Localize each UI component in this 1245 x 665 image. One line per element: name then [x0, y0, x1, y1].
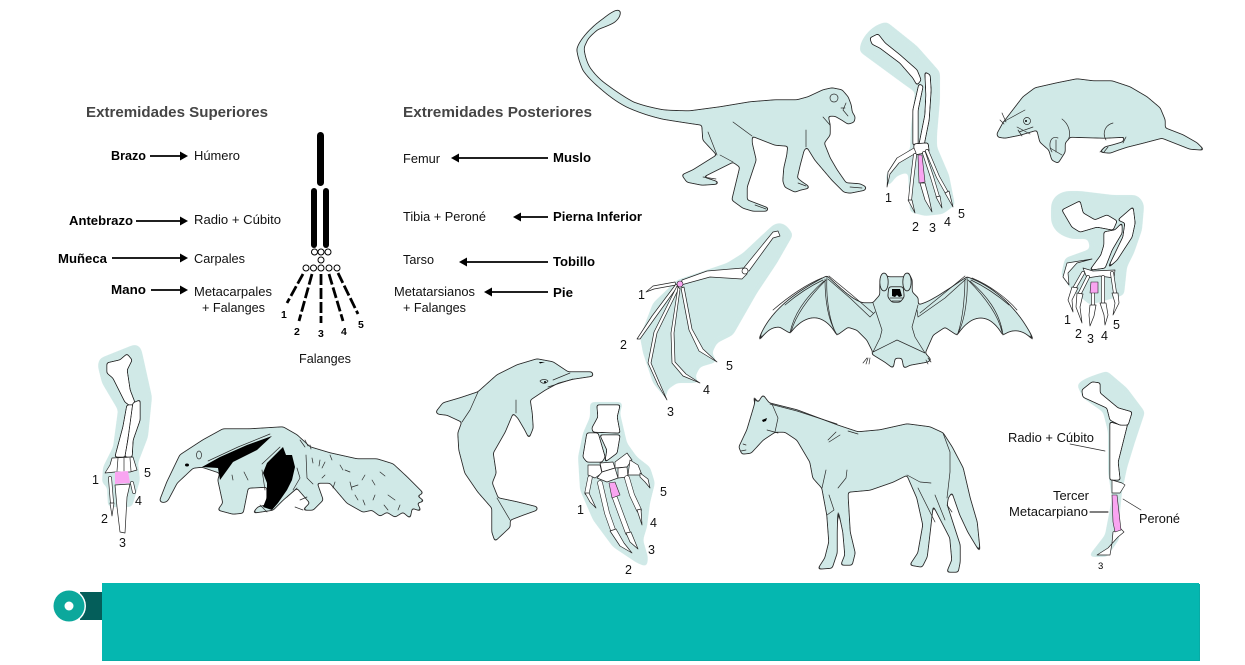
- illustration: bat: [758, 272, 1035, 368]
- panel: mole forelimb skeleton: [1051, 191, 1144, 346]
- digit numbers: 1: [281, 309, 287, 321]
- digit labels: 3: [667, 405, 674, 419]
- carpal circles: [303, 249, 340, 271]
- row: thigh to femur: [403, 151, 591, 166]
- row: wrist to carpals: Muñeca: [58, 252, 108, 266]
- label: third metacarpal: Metacarpiano: [1009, 505, 1088, 519]
- arm bones: [1082, 382, 1132, 555]
- digit numbers: 5: [358, 319, 364, 331]
- digit numbers: 3: [318, 328, 324, 340]
- row: wrist to carpals: Carpales: [194, 252, 245, 266]
- limb background: [860, 22, 955, 216]
- highlighted metacarpal: [1090, 282, 1098, 293]
- row: arm to humerus: [111, 149, 240, 163]
- digit labels: [885, 191, 965, 235]
- row: hand to metacarpals and phalanges: + Falanges: [202, 301, 265, 315]
- label: fibula: [1123, 499, 1180, 526]
- digit labels: 2: [101, 512, 108, 526]
- arm and wrist bones: [583, 405, 642, 482]
- row: thigh to femur: Femur: [403, 152, 440, 166]
- digit labels: 2: [912, 220, 919, 234]
- highlighted metacarpal: [609, 482, 620, 498]
- digit labels: 3: [119, 536, 126, 550]
- black shoulder stripe: [202, 436, 272, 480]
- digit labels: 5: [660, 485, 667, 499]
- arm bones: [681, 231, 780, 285]
- limb background: [98, 345, 152, 507]
- digit labels: [92, 466, 151, 550]
- arm bones: [1062, 201, 1135, 285]
- digit numbers: 4: [341, 326, 347, 338]
- panel: horse forelimb skeleton: [1008, 371, 1180, 572]
- digit labels: [1064, 313, 1120, 346]
- illustration: anteater: [160, 427, 424, 518]
- digit labels: 1: [638, 288, 645, 302]
- humerus bar: [317, 132, 324, 186]
- row: foot to metatarsals and phalanges: [394, 285, 573, 315]
- dark tab: [80, 592, 102, 620]
- dashed phalanges: [287, 273, 358, 323]
- digit labels: 1: [1064, 313, 1071, 327]
- limb background: [1051, 191, 1144, 305]
- row: lower leg to tibia and fibula: Pierna Inferior: [553, 210, 642, 224]
- label: phalanges: Falanges: [299, 352, 351, 366]
- finger bones: [585, 473, 650, 553]
- finger bones: [110, 478, 134, 533]
- row: hand to metacarpals and phalanges: Mano: [111, 283, 146, 297]
- digit labels: 3: [648, 543, 655, 557]
- row: ankle to tarsus: [403, 253, 595, 269]
- digit labels: 3: [1087, 332, 1094, 346]
- panel: anteater forelimb skeleton: [92, 345, 152, 550]
- black foreleg patch: [263, 447, 295, 510]
- highlighted metacarpal: [115, 471, 130, 484]
- row: foot to metatarsals and phalanges: Metatarsianos: [394, 285, 475, 299]
- footer bar with bullet: [52, 583, 1200, 661]
- digit labels: 2: [1075, 327, 1082, 341]
- digit numbers: 2: [294, 326, 300, 338]
- row: wrist to carpals: [58, 252, 245, 266]
- row: forearm to radius and ulna: Antebrazo: [69, 214, 133, 228]
- digit labels: 1: [885, 191, 892, 205]
- digit numbers: [281, 309, 364, 340]
- row: lower leg to tibia and fibula: Tibia + Peroné: [403, 210, 486, 224]
- digit labels: 4: [135, 494, 142, 508]
- label: third metacarpal: [1009, 489, 1108, 519]
- radius and ulna bars: [311, 188, 329, 248]
- bar shadow: [102, 584, 1200, 661]
- row: ankle to tarsus: Tobillo: [553, 255, 595, 269]
- digit labels: 3: [929, 221, 936, 235]
- limb background: [1077, 371, 1145, 557]
- teal bar: [102, 583, 1199, 660]
- illustration: dolphin: [436, 359, 593, 541]
- digit labels: 2: [620, 338, 627, 352]
- row: arm to humerus: Brazo: [111, 149, 146, 163]
- row: thigh to femur: Muslo: [553, 151, 591, 165]
- digit labels: 5: [144, 466, 151, 480]
- row: arm to humerus: Húmero: [194, 149, 240, 163]
- digit label: 3: [1098, 561, 1103, 572]
- digit labels: 4: [944, 215, 951, 229]
- digit labels: 1: [577, 503, 584, 517]
- row: forearm to radius and ulna: [69, 213, 281, 228]
- arm bones: [105, 354, 140, 473]
- finger bones: [887, 148, 953, 213]
- highlighted metacarpal: [1112, 495, 1121, 532]
- bullet circle: [52, 589, 86, 623]
- digit labels: 2: [625, 563, 632, 577]
- digit labels: 5: [1113, 318, 1120, 332]
- row: ankle to tarsus: Tarso: [403, 253, 434, 267]
- finger bones: [637, 282, 717, 400]
- label: radius and ulna: [1008, 431, 1105, 451]
- digit labels: 4: [650, 516, 657, 530]
- fur lines, eye and body details: [185, 434, 400, 512]
- row: hand to metacarpals and phalanges: [111, 283, 272, 315]
- illustration: monkey: [577, 10, 866, 211]
- diagram: generalized limb skeleton: [281, 132, 364, 366]
- row: forearm to radius and ulna: Radio + Cúbito: [194, 213, 281, 227]
- label: fibula: Peroné: [1139, 512, 1180, 526]
- row: foot to metatarsals and phalanges: + Falanges: [403, 301, 466, 315]
- heading: lower limbs: Extremidades Posteriores: [403, 104, 592, 121]
- digit labels: 1: [92, 473, 99, 487]
- digit labels: 5: [726, 359, 733, 373]
- limb background: [640, 223, 793, 400]
- row: lower leg to tibia and fibula: [403, 210, 642, 224]
- panel: upper limbs diagram: [58, 104, 281, 315]
- panel: bat wing skeleton: [620, 223, 793, 419]
- digit labels: 4: [703, 383, 710, 397]
- row: foot to metatarsals and phalanges: Pie: [553, 286, 573, 300]
- digit labels: [577, 485, 667, 577]
- limb background: [578, 402, 655, 567]
- finger bones: [1068, 273, 1119, 326]
- heading: upper limbs: Extremidades Superiores: [86, 104, 268, 121]
- label: third metacarpal: Tercer: [1053, 489, 1089, 503]
- panel: dolphin flipper skeleton: [577, 402, 667, 577]
- digit labels: [620, 288, 733, 419]
- label: radius and ulna: Radio + Cúbito: [1008, 431, 1094, 445]
- arm bones: [870, 34, 931, 155]
- row: hand to metacarpals and phalanges: Metacarpales: [194, 285, 272, 299]
- panel: lower limbs diagram: [394, 104, 642, 315]
- illustration: mole: [997, 79, 1204, 163]
- highlighted metacarpal: [918, 155, 925, 183]
- panel: monkey forelimb skeleton: [860, 22, 965, 235]
- illustration: horse: [739, 395, 980, 572]
- highlighted wrist: [677, 281, 683, 287]
- digit labels: 5: [958, 207, 965, 221]
- digit labels: 4: [1101, 329, 1108, 343]
